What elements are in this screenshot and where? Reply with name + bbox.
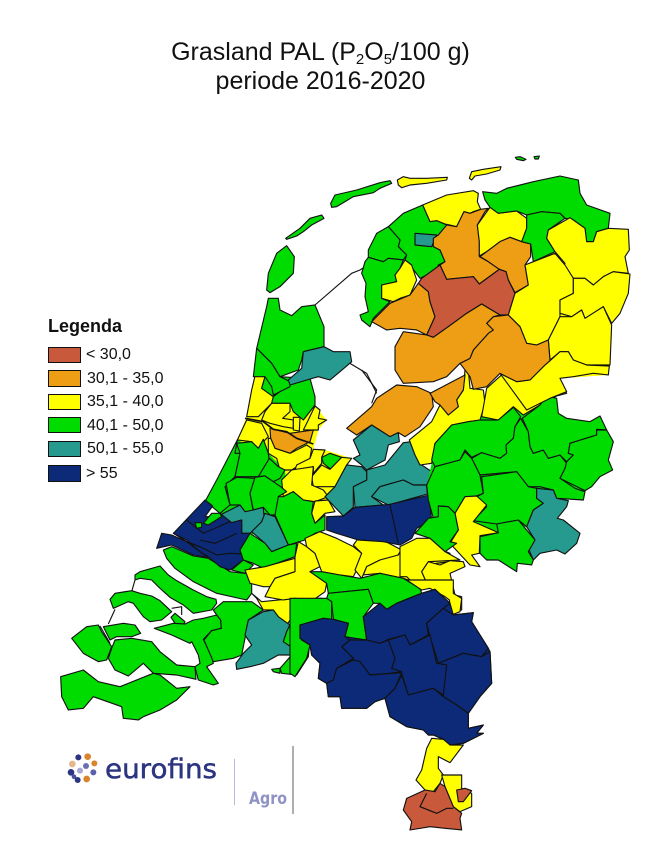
legend heading: Legenda (48, 316, 122, 336)
Wadden islands (267, 156, 539, 293)
North Sea canal (245, 418, 313, 444)
east: Overijssel and Gelderland (400, 370, 613, 610)
west: Holland and Utrecht (157, 370, 450, 600)
legend swatch: 35-40 (48, 394, 81, 410)
yellow regions (409, 370, 567, 465)
legend swatch: under 30 (48, 347, 81, 363)
green regions (400, 396, 613, 610)
Friesland (360, 191, 531, 337)
title: Grasland PAL (P2O5/100 g) (171, 38, 470, 68)
Zeeland islands (61, 547, 252, 720)
southwest: Zeeland and West-Brabant (61, 547, 332, 720)
Noord-Holland north (253, 298, 377, 395)
legend swatch: over 55 (48, 465, 81, 482)
Flevoland and Overijssel orange regions (395, 304, 550, 389)
teal Veluwe regions (325, 425, 437, 516)
coastal and Holland regions (205, 370, 352, 552)
Afsluitdijk (315, 267, 365, 305)
green Brabant regions (290, 572, 462, 677)
south: Noord-Brabant east and Limburg (290, 572, 492, 830)
Flevoland (347, 385, 433, 437)
legend swatch: 40-50 (48, 417, 81, 433)
navy regions (300, 589, 492, 745)
legend swatch: 50-55 (48, 441, 81, 457)
West-Brabant regions (154, 593, 332, 685)
legend label: 50-55: 50,1 - 55,0 (87, 440, 164, 457)
logo sub-brand: Agro (249, 789, 287, 809)
legend label: under 30: < 30,0 (86, 346, 131, 363)
north: Friesland, Groningen, Drenthe, Noord-Holland (253, 156, 630, 410)
Groningen and Drenthe (483, 176, 630, 410)
legend label: 40-50: 40,1 - 50,0 (87, 417, 164, 434)
logo wordmark: eurofins (105, 754, 217, 785)
legend label: over 55: > 55 (86, 465, 118, 482)
Limburg yellow and red regions (403, 738, 472, 830)
legend (48, 316, 164, 482)
title: periode 2016-2020 (216, 67, 425, 95)
navy river region (327, 494, 435, 545)
southern Holland and Brabant regions (232, 532, 450, 600)
legend swatch: 30-35 (48, 370, 81, 387)
Rotterdam navy regions (157, 500, 250, 570)
legend label: 30-35: 30,1 - 35,0 (87, 370, 164, 387)
logo divider (234, 759, 235, 805)
legend label: 35-40: 35,1 - 40,0 (87, 393, 164, 410)
logo right rule (292, 746, 294, 814)
title (171, 38, 470, 95)
icon: logo dots (68, 753, 97, 783)
